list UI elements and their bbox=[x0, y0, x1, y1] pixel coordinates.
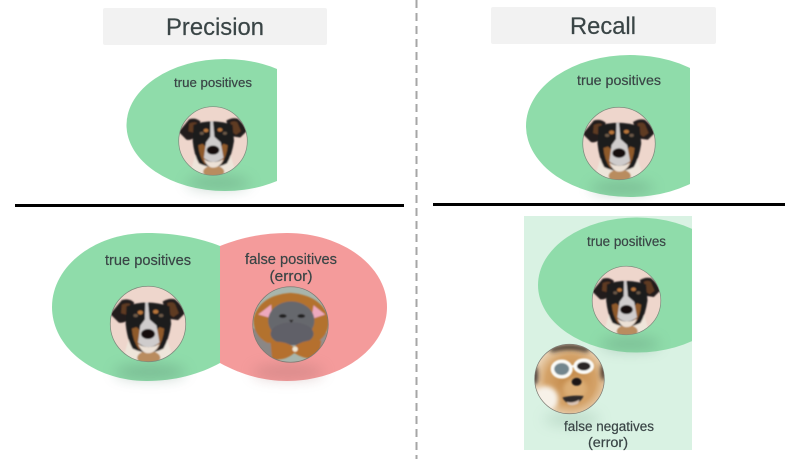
false negatives: (error) bbox=[588, 435, 628, 450]
denominator: true positives side: true positives bbox=[105, 253, 191, 269]
fraction bar bbox=[15, 204, 404, 207]
panel: recall bbox=[433, 7, 785, 450]
heading: Precision: Precision bbox=[166, 14, 264, 41]
numerator: true positives shape: true positives bbox=[174, 75, 253, 90]
numerator: true positives shape bbox=[126, 59, 277, 196]
numerator: true positives shape: true positives bbox=[577, 72, 661, 88]
panel: precision bbox=[15, 8, 404, 381]
denominator: true positives side bbox=[52, 233, 220, 381]
denominator: light green area bbox=[524, 216, 692, 450]
vertical dashed divider bbox=[416, 0, 418, 459]
fraction bar bbox=[433, 203, 785, 206]
true positives shape: true positives bbox=[587, 234, 666, 249]
denominator: false positives side: (error) bbox=[270, 269, 312, 285]
denominator: false positives side: false positives bbox=[245, 252, 337, 268]
heading: Precision bbox=[103, 8, 327, 45]
false negatives bbox=[532, 344, 654, 450]
heading: Recall bbox=[491, 7, 716, 44]
heading: Recall: Recall bbox=[570, 13, 636, 40]
true positives shape bbox=[538, 218, 692, 356]
numerator: true positives shape bbox=[526, 55, 690, 202]
denominator: false positives side bbox=[220, 233, 387, 381]
false negatives: false negatives bbox=[564, 419, 654, 434]
